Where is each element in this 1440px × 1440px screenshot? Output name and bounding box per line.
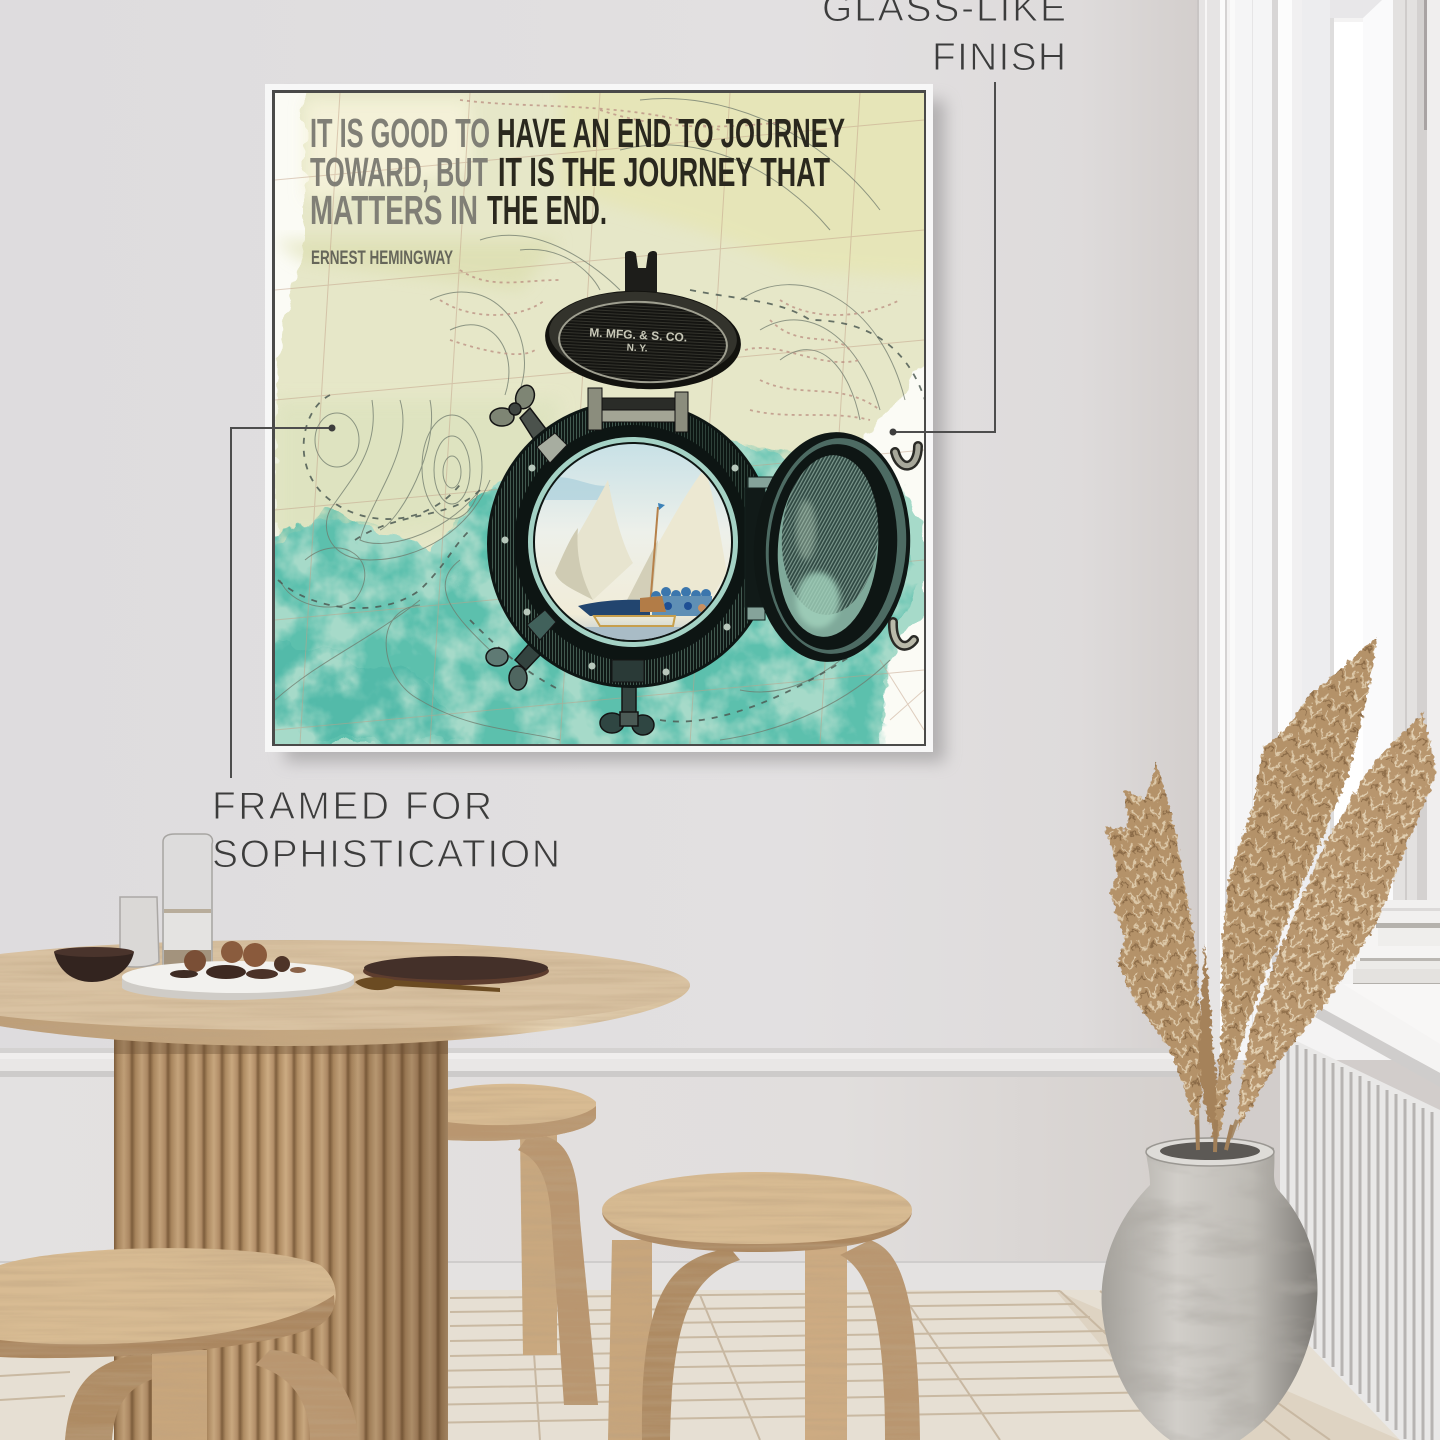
lifted lid: N. Y. [626,342,648,355]
grass stems [1197,1100,1237,1150]
main porthole ring [487,400,775,688]
glass carafe [163,834,213,966]
table setting [54,834,549,1000]
radiator [1280,1033,1440,1440]
lifted lid: M. MFG. & S. CO. [589,325,688,345]
wing nuts [486,383,654,735]
wing-nut blocks [527,433,644,682]
fluted table pedestal [114,1035,448,1440]
callout: framed for sophistication [212,424,560,876]
back stool [447,1084,598,1405]
open door hinges [745,477,773,620]
author credit: ERNEST HEMINGWAY [311,248,453,269]
dark wood plate [363,956,549,985]
spoon [355,977,500,992]
framed artwork [260,80,945,762]
rivets [502,464,738,676]
frame shadow [285,100,945,762]
quote line 2 dark: IT IS THE JOURNEY THAT [498,149,830,195]
wainscot lower wall [0,1048,1200,1291]
round table top [0,940,690,1046]
map contour lines [275,98,905,740]
pressure front lines [278,290,925,722]
callout leader line [896,82,995,432]
ceramic vase [1102,1120,1318,1440]
quote line 1 muted: IT IS GOOD TO [310,110,490,156]
marble plate [122,961,354,1000]
porthole window sailing ship [530,440,735,645]
window sill with books [1315,900,1440,1087]
pampas grass in vase [1105,637,1437,1150]
callout text: SOPHISTICATION [212,833,560,876]
dark bowl [54,947,134,982]
quote line 1 dark: HAVE AN END TO JOURNEY [497,110,845,156]
watercolor wash [260,80,940,760]
white frame [265,84,933,752]
open door glass [763,432,910,662]
quote line 2 muted: TOWARD, BUT [310,149,488,195]
quote line 3 dark: THE END. [487,187,607,233]
callout text: FINISH [932,36,1066,79]
inner dark liner [272,90,926,746]
hinge arms [588,388,688,432]
art print [260,80,940,760]
callout leader line [231,428,330,778]
callout text: FRAMED FOR [212,785,492,828]
porthole [486,251,918,735]
quote [310,110,845,269]
callout: glass-like finish [822,0,1066,436]
callout anchor dot [328,424,336,432]
front stool right [602,1172,920,1440]
quote line 3 muted: MATTERS IN [310,187,478,233]
map grid lines [275,93,924,744]
tall center plume [1215,637,1377,1140]
drinking glass [120,897,159,967]
front stool left [0,1248,358,1440]
thin center plume [1198,943,1222,1140]
wooden floor [0,1290,1440,1440]
right plume [1237,713,1437,1130]
callout anchor dot [890,428,896,436]
lifted lid [543,251,743,394]
nuts [170,941,306,979]
left plume [1105,762,1202,1130]
window and trim [1197,0,1440,1060]
door clamps [893,446,918,646]
map annotations [440,100,900,420]
